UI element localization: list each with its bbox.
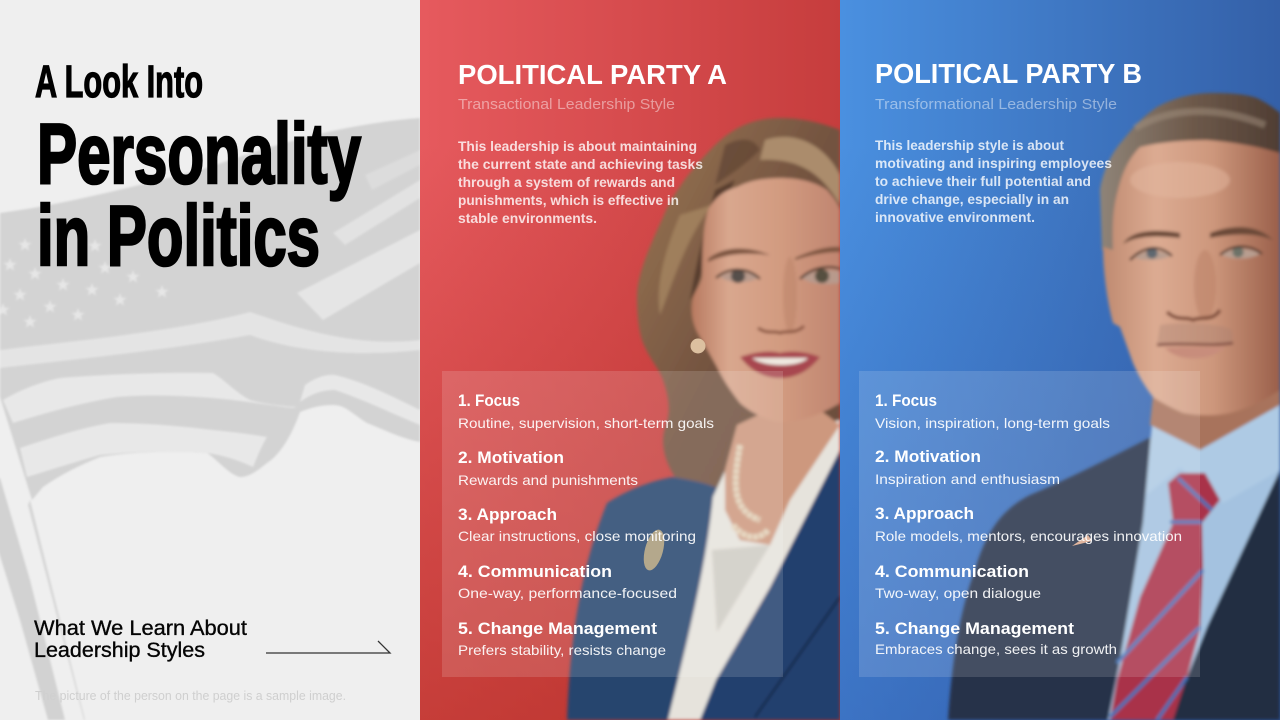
party b description: innovative environment. [875,210,1035,225]
party b description: motivating and inspiring employees [875,156,1112,171]
party b description: to achieve their full potential and [875,174,1091,189]
party b description [875,138,1112,225]
party a description [458,139,703,226]
party b list: Role models, mentors, encourages innovation [875,528,1182,544]
subtitle: what we learn: What We Learn About [34,617,247,640]
party a leadership style: Transactional Leadership Style [458,96,675,113]
party a description: the current state and achieving tasks [458,157,703,172]
party a list: Routine, supervision, short-term goals [458,415,714,431]
footnote: The picture of the person on the page is a sample image. [35,688,346,703]
title: in politics: in Politics [37,189,320,284]
party a list: 3. Approach [458,505,557,524]
party a list: 2. Motivation [458,448,564,467]
party a list: One-way, performance-focused [458,585,677,601]
party b list: Two-way, open dialogue [875,585,1041,601]
subtitle: what we learn [34,617,247,662]
panel: political party b [840,0,1280,720]
party b list: 2. Motivation [875,447,981,466]
party b list: 3. Approach [875,504,974,523]
party a list: 5. Change Management [458,619,657,638]
subtitle: what we learn: Leadership Styles [34,639,205,662]
party b list [875,391,1182,657]
party a translucent list card [442,371,783,677]
party b list: 1. Focus [875,391,937,410]
title: personality: Personality [37,107,361,202]
party a description: through a system of rewards and [458,175,675,190]
portrait: man [948,93,1280,720]
panel: political party a [420,0,840,720]
party b description: This leadership style is about [875,138,1064,153]
party a list: Rewards and punishments [458,472,638,488]
panel: title column [0,0,420,720]
party a list: Clear instructions, close monitoring [458,528,696,544]
party a list [458,391,714,658]
party a list: 1. Focus [458,391,520,410]
earring [690,338,706,354]
party b list: 5. Change Management [875,619,1074,638]
party a description: punishments, which is effective in [458,193,679,208]
party b list: Vision, inspiration, long-term goals [875,415,1110,431]
party b list: Embraces change, sees it as growth [875,641,1117,657]
party a list: Prefers stability, resists change [458,642,666,658]
party b list: 4. Communication [875,562,1029,581]
flag background image [0,118,420,720]
party b description: drive change, especially in an [875,192,1069,207]
party b heading: POLITICAL PARTY B [875,58,1142,89]
title: a look into: A Look Into [35,56,203,107]
party a list: 4. Communication [458,562,612,581]
portrait: woman [567,118,840,720]
party a description: This leadership is about maintaining [458,139,697,154]
party a heading: POLITICAL PARTY A [458,59,727,90]
arrow [266,641,390,653]
party a description: stable environments. [458,211,597,226]
party b leadership style: Transformational Leadership Style [875,96,1117,113]
brooch [644,530,664,570]
party b list: Inspiration and enthusiasm [875,471,1060,487]
party b translucent list card [859,371,1200,677]
lapel pin [1072,535,1092,546]
